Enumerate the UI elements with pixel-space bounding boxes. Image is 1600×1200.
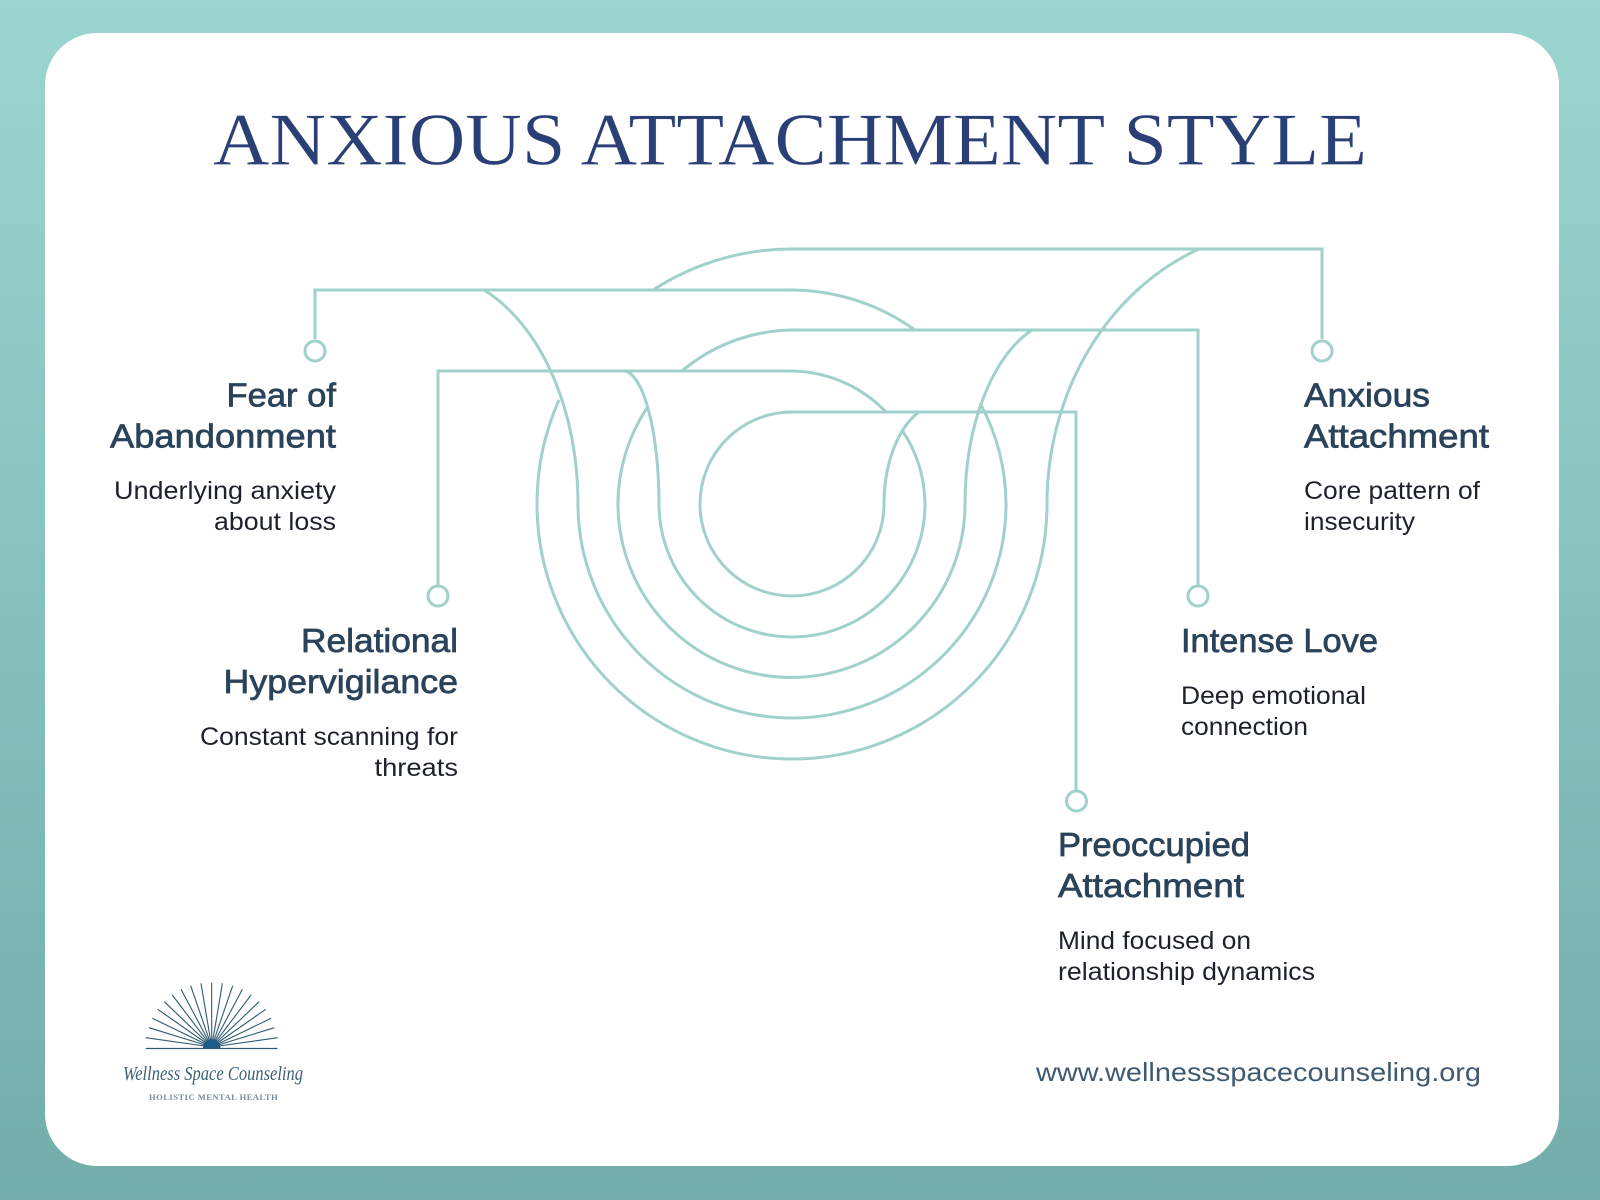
label: preoccupied attachment: Preoccupied	[1058, 826, 1250, 863]
label: anxious attachment: Core pattern of	[1304, 477, 1480, 505]
label: intense love	[1181, 622, 1378, 741]
label: relational hypervigilance: Relational	[301, 622, 458, 659]
label: intense love: Deep emotional	[1181, 682, 1366, 710]
node: intense love	[1188, 586, 1208, 606]
logo: wellness space counseling	[123, 983, 303, 1102]
label: anxious attachment: Anxious	[1304, 376, 1430, 414]
label: fear of abandonment: Fear of	[226, 376, 337, 414]
label: fear of abandonment: about loss	[214, 508, 336, 536]
label: intense love: connection	[1181, 713, 1308, 741]
node: preoccupied attachment	[1066, 791, 1086, 811]
label: relational hypervigilance: Constant scanning for	[200, 723, 458, 751]
node: anxious attachment	[1312, 341, 1332, 361]
label: relational hypervigilance: Hypervigilance	[224, 663, 458, 700]
label: preoccupied attachment: relationship dynamics	[1058, 958, 1315, 986]
label: preoccupied attachment: Attachment	[1058, 867, 1244, 904]
logo tagline: HOLISTIC MENTAL HEALTH	[149, 1092, 278, 1102]
label: anxious attachment	[1304, 376, 1489, 536]
ring path: relational hypervigilance	[438, 371, 925, 637]
label: intense love: Intense Love	[1181, 622, 1378, 659]
ring path: fear of abandonment	[315, 290, 1006, 718]
label: anxious attachment: insecurity	[1304, 508, 1416, 536]
label: fear of abandonment	[110, 376, 337, 536]
label: fear of abandonment: Abandonment	[110, 418, 336, 454]
node: fear of abandonment	[305, 341, 325, 361]
ring path: intense love	[618, 330, 1198, 677]
label: anxious attachment: Attachment	[1304, 418, 1489, 454]
label: preoccupied attachment: Mind focused on	[1058, 927, 1251, 955]
ring path: anxious attachment	[537, 249, 1322, 759]
logo script name: Wellness Space Counseling	[123, 1063, 303, 1085]
node: relational hypervigilance	[428, 586, 448, 606]
label: relational hypervigilance: threats	[374, 754, 458, 782]
label: relational hypervigilance	[200, 622, 458, 782]
concentric line diagram	[315, 249, 1322, 790]
ring path: preoccupied attachment	[700, 412, 1076, 790]
label: preoccupied attachment	[1058, 826, 1315, 986]
label: fear of abandonment: Underlying anxiety	[114, 477, 337, 505]
title: ANXIOUS ATTACHMENT STYLE	[213, 100, 1367, 182]
website url: www.wellnessspacecounseling.org	[1035, 1057, 1481, 1087]
icon: sunburst	[146, 983, 278, 1048]
